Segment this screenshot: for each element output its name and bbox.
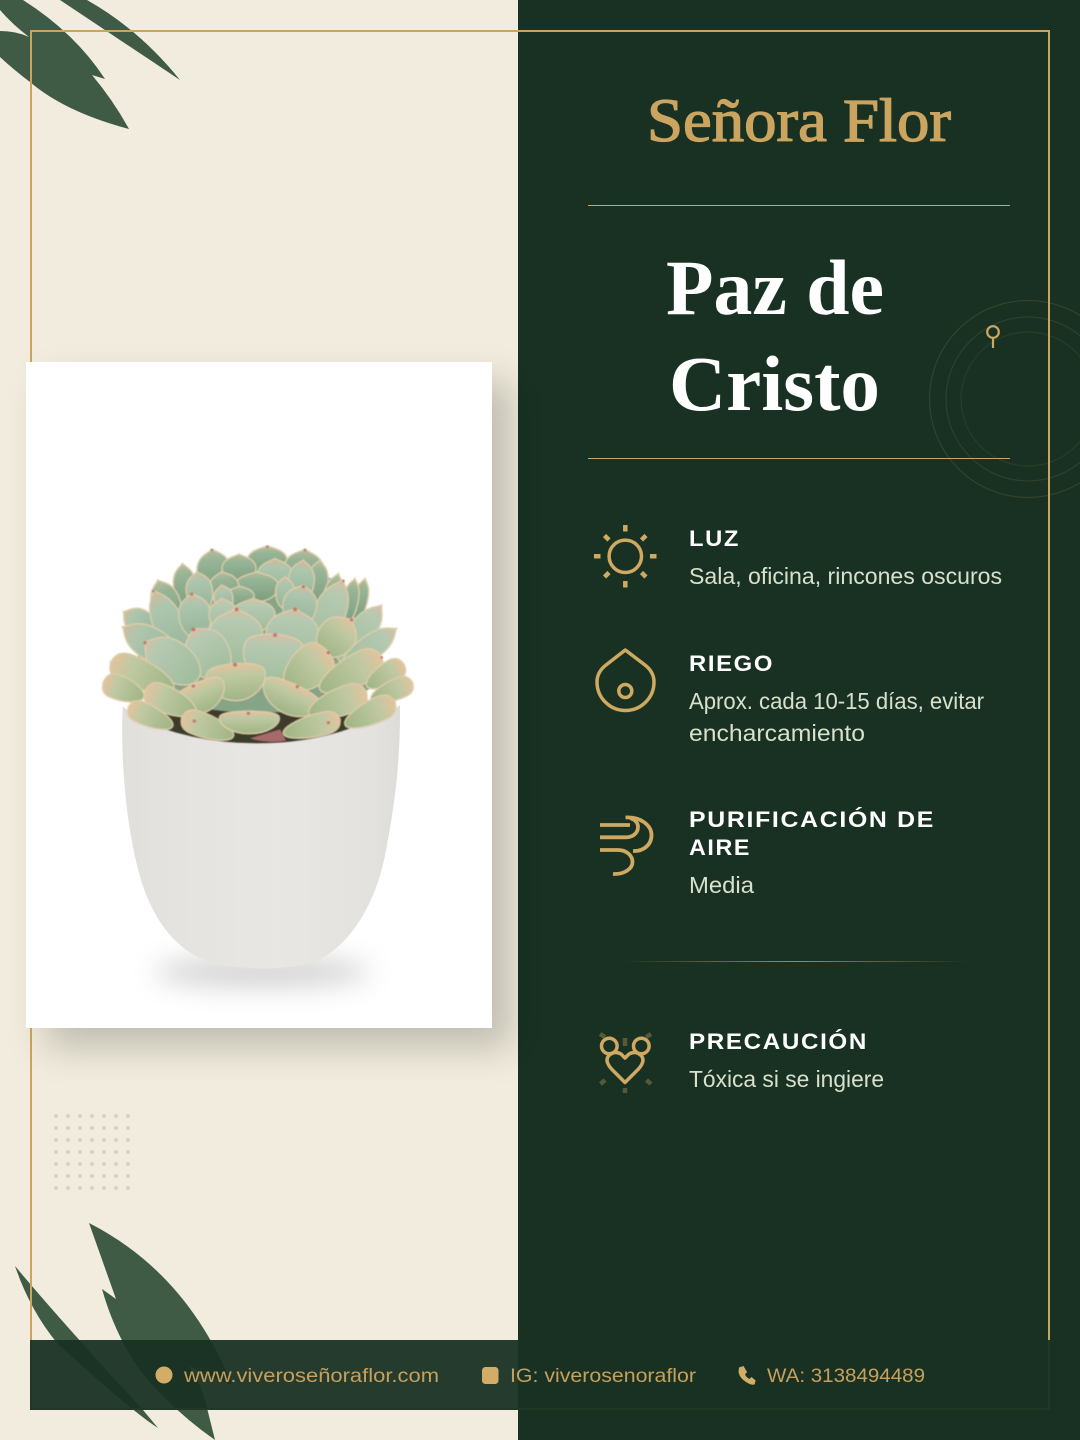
icon: leaves bottom left (15, 1223, 232, 1440)
text block: riego: RIEGO (689, 651, 774, 676)
icon: sun (594, 525, 656, 588)
footer text: instagram: IG: viverosenoraflor (510, 1365, 697, 1387)
photo card shadow (46, 382, 512, 1048)
text block: riego: encharcamiento (689, 720, 865, 746)
panel: photo card (26, 362, 492, 1028)
divider bottom (588, 458, 1010, 459)
divider top (588, 205, 1010, 206)
plant name heading: Paz de (666, 244, 884, 331)
text block: riego (689, 651, 984, 746)
text block: luz (689, 526, 1002, 589)
icon: wind (600, 817, 652, 874)
background: cream left panel (0, 0, 518, 1440)
plant name heading (666, 244, 884, 427)
icon: water drop (597, 650, 654, 710)
brand title: Señora Flor (647, 88, 951, 155)
text block: purificacion (689, 807, 935, 898)
pot shadow (154, 956, 370, 988)
icon: phone (738, 1366, 756, 1385)
icon: instagram square (482, 1367, 498, 1384)
icon: web dot (156, 1366, 172, 1384)
footer text: whatsapp: WA: 3138494489 (767, 1365, 925, 1387)
text block: luz: Sala, oficina, rincones oscuros (689, 563, 1002, 589)
text block: luz: LUZ (689, 526, 740, 551)
illustration: succulent rosette (99, 545, 417, 747)
illustration: white pot (122, 705, 400, 968)
text block: precaucion: PRECAUCIÓN (689, 1029, 868, 1054)
footer text: website: www.viveroseñoraflor.com (183, 1365, 439, 1387)
icon: heart caution (600, 1034, 651, 1093)
text block: purificacion: Media (689, 872, 754, 898)
icon: pin (987, 326, 999, 348)
footer bar (30, 1340, 1050, 1410)
dot grid (54, 1114, 130, 1190)
plant name heading: Cristo (669, 340, 880, 427)
decorative concentric circles (930, 300, 1080, 498)
text block: purificacion: PURIFICACIÓN DE (689, 807, 935, 832)
icon: leaves top left (0, 0, 180, 129)
text block: precaucion: Tóxica si se ingiere (689, 1066, 884, 1092)
text block: purificacion: AIRE (689, 835, 751, 860)
text block: riego: Aprox. cada 10-15 días, evitar (689, 688, 984, 714)
text block: precaucion (689, 1029, 884, 1092)
divider faded (620, 961, 970, 962)
panel: dark green right panel (518, 0, 1080, 1440)
